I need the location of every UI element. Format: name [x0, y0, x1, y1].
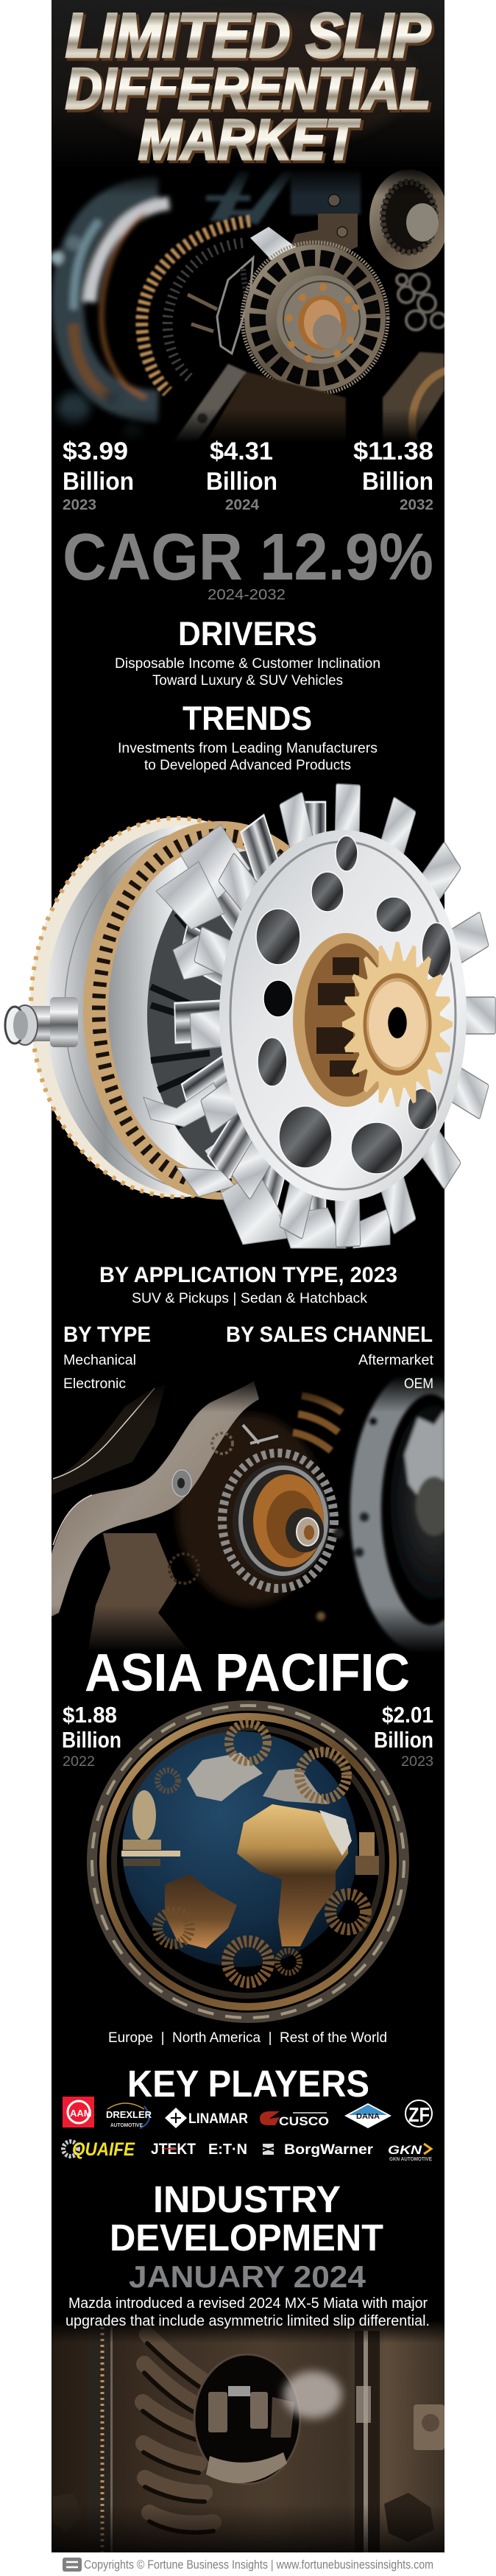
- development text: upgrades that include asymmetric limited slip differential.: [65, 2313, 430, 2329]
- trends text: [118, 741, 378, 773]
- asia pacific 2022 value: $1.88: [63, 1702, 117, 1728]
- title: DIFFERENTIAL: [68, 58, 433, 123]
- asia pacific 2023 value: 2023: [401, 1754, 433, 1770]
- stat 2032: $11.38: [353, 437, 433, 465]
- application type heading: BY APPLICATION TYPE, 2023: [99, 1263, 397, 1287]
- development text: Mazda introduced a revised 2024 MX-5 Miata with major: [68, 2295, 428, 2312]
- front face disc: [219, 830, 467, 1201]
- drivers text: [115, 656, 380, 689]
- outer rings: [92, 1706, 404, 2018]
- logo: GKN: GKN: [388, 2143, 422, 2157]
- logo: AAM: AAM: [70, 2108, 92, 2119]
- logo: Drexler: DREXLER: [106, 2109, 152, 2120]
- footer logo: [63, 2558, 82, 2572]
- logo: Eaton: E:T·N: [208, 2142, 247, 2158]
- black infographic panel: [52, 0, 444, 2552]
- stat 2023: [63, 437, 134, 513]
- coil spring: [293, 1396, 342, 1451]
- main toothed wheel: [242, 242, 388, 394]
- silver arm: [52, 1381, 259, 1616]
- chrome slab highlights: [144, 825, 390, 1248]
- development date: JANUARY 2024: [129, 2259, 366, 2294]
- logo: Linamar: LINAMAR: [188, 2111, 248, 2127]
- bronze gear teeth arc: [142, 221, 250, 392]
- left gear pile: [132, 1790, 156, 1840]
- logo: Drexler: AUTOMOTIVE: [110, 2123, 143, 2128]
- logo: Dana: DANA: [356, 2113, 380, 2121]
- other regions: Europe | North America | Rest of the World: [108, 2030, 387, 2046]
- axle shaft: [5, 997, 78, 1047]
- chrome differential gear: [5, 784, 495, 1248]
- front fins: [190, 784, 495, 1247]
- stat 2024: Billion: [206, 468, 277, 496]
- asia pacific 2022 value: [62, 1702, 121, 1770]
- by sales channel items: OEM: [404, 1376, 433, 1392]
- development text: [65, 2295, 430, 2329]
- stat 2024: 2024: [225, 497, 260, 513]
- gold hub: [293, 933, 399, 1107]
- asia pacific 2022 value: 2022: [63, 1754, 95, 1770]
- arm highlights: [53, 1388, 155, 1545]
- logo: ZF: ZF: [408, 2103, 430, 2126]
- arabia: [319, 1810, 352, 1856]
- stat 2023: Billion: [63, 468, 134, 496]
- title: DIFFERENTIAL: [65, 56, 431, 121]
- upper right wheel: [369, 169, 449, 270]
- CAGR: CAGR 12.9%: [63, 521, 433, 594]
- logo: BorgWarner: BorgWarner: [284, 2142, 374, 2158]
- housing body: [52, 2320, 444, 2552]
- logo: AAM: [63, 2097, 94, 2128]
- footer copyright: Copyrights © Fortune Business Insights | www.fortunebusinessinsights.com: [84, 2558, 433, 2572]
- stat 2032: Billion: [362, 468, 433, 496]
- logo: Dana: [344, 2103, 392, 2128]
- europe: [263, 1768, 329, 1804]
- trends heading: TRENDS: [183, 700, 312, 737]
- asia pacific heading: ASIA PACIFIC: [85, 1644, 410, 1703]
- asia pacific 2023 value: $2.01: [382, 1702, 433, 1728]
- chain links: [188, 258, 254, 353]
- chrome and bronze hub: [222, 1453, 334, 1588]
- title background: [52, 0, 444, 171]
- tan bracket: [291, 194, 358, 252]
- by type items: Electronic: [63, 1376, 126, 1392]
- stat 2024: $4.31: [210, 437, 273, 465]
- interior chrome streaks: [151, 854, 247, 1152]
- bright housing highlight: [283, 2371, 342, 2418]
- blurred outer ring: [50, 193, 169, 407]
- by type heading: BY TYPE: [63, 1323, 151, 1347]
- lower bracket: [88, 1533, 188, 1650]
- trends text: Investments from Leading Manufacturers: [118, 741, 378, 756]
- stat 2032: [353, 437, 433, 513]
- chrome interior: [147, 850, 368, 1181]
- photo: gears middle: [52, 1378, 444, 1650]
- small cluster gears: [397, 274, 446, 330]
- lower right bronze wheel: [381, 351, 444, 440]
- stat 2024: [206, 437, 277, 513]
- right cylinder: [355, 1832, 379, 1875]
- photo: differential housing: [52, 2320, 444, 2552]
- logo: GKN: [388, 2143, 432, 2162]
- back disc with gold edge: [30, 817, 347, 1197]
- by type items: Mechanical: [63, 1353, 136, 1368]
- asia pacific 2022 value: Billion: [62, 1727, 121, 1753]
- industry development heading: INDUSTRY: [153, 2178, 341, 2220]
- ring gear band: [100, 2323, 113, 2552]
- logo: Drexler: [106, 2103, 152, 2128]
- drivers text: Toward Luxury & SUV Vehicles: [152, 673, 343, 689]
- small gears behind: [169, 1425, 278, 1583]
- logo: JTEKT: JTEKT: [151, 2141, 196, 2158]
- gold gear: [342, 942, 453, 1107]
- arm bolt: [172, 1470, 191, 1496]
- trends text: to Developed Advanced Products: [144, 758, 351, 773]
- logo: Quaife: QUAIFE: [72, 2139, 135, 2160]
- title: LIMITED SLIP: [65, 1, 431, 70]
- asia pacific 2023 value: Billion: [374, 1727, 433, 1753]
- drivers text: Disposable Income & Customer Inclination: [115, 656, 380, 672]
- key players heading: KEY PLAYERS: [127, 2063, 369, 2105]
- ocean: [122, 1731, 358, 1967]
- dark bronze machinery behind hub: [177, 1414, 324, 1605]
- industry development heading: [110, 2178, 383, 2259]
- right housing bolt plate: [384, 2404, 444, 2542]
- hypoid teeth: [143, 2334, 213, 2533]
- machinery tower: [121, 1840, 180, 1866]
- logo: Cusco: [260, 2111, 329, 2128]
- by sales channel items: Aftermarket: [358, 1353, 434, 1368]
- blurred lower-left bokeh: [57, 390, 141, 443]
- right collar: [355, 2331, 380, 2552]
- stat 2032: 2032: [400, 497, 433, 513]
- lower strut: [174, 364, 346, 442]
- window opening: [194, 2354, 300, 2484]
- blurred upper mechanism: [206, 171, 361, 225]
- CAGR period: 2024-2032: [208, 587, 286, 603]
- face holes: [256, 836, 451, 1174]
- left bolt: [53, 2496, 56, 2510]
- by sales channel heading: BY SALES CHANNEL: [226, 1323, 433, 1347]
- logo: Cusco: CUSCO: [279, 2114, 329, 2128]
- dark upper arm shadow: [52, 1384, 166, 1495]
- application type items: SUV & Pickups | Sedan & Hatchback: [132, 1291, 368, 1306]
- africa: [237, 1804, 348, 1946]
- by sales channel items: [358, 1353, 434, 1392]
- bronze machinery: [157, 1723, 366, 1982]
- south america: [165, 1874, 237, 1949]
- north america: [187, 1753, 263, 1801]
- right blurred wheel: [315, 1378, 444, 1650]
- asia pacific 2023 value: [374, 1702, 433, 1770]
- logo: GKN: GKN AUTOMOTIVE: [389, 2157, 432, 2162]
- silver clamp: [250, 227, 296, 261]
- title: LIMITED SLIP: [68, 3, 433, 72]
- photo: gears header: [50, 166, 496, 478]
- title: MARKET: [138, 108, 360, 172]
- mechanical globe: [92, 1706, 404, 2018]
- by type items: [63, 1353, 136, 1392]
- gold tooth ring: [96, 834, 346, 1187]
- stat 2023: 2023: [63, 497, 96, 513]
- title: [65, 1, 433, 174]
- drivers heading: DRIVERS: [178, 615, 317, 652]
- rear chrome fins: [174, 802, 325, 1229]
- logo: Linamar: [165, 2108, 248, 2128]
- industry development heading: DEVELOPMENT: [110, 2217, 383, 2259]
- stat 2023: $3.99: [63, 437, 128, 465]
- title: MARKET: [141, 110, 362, 174]
